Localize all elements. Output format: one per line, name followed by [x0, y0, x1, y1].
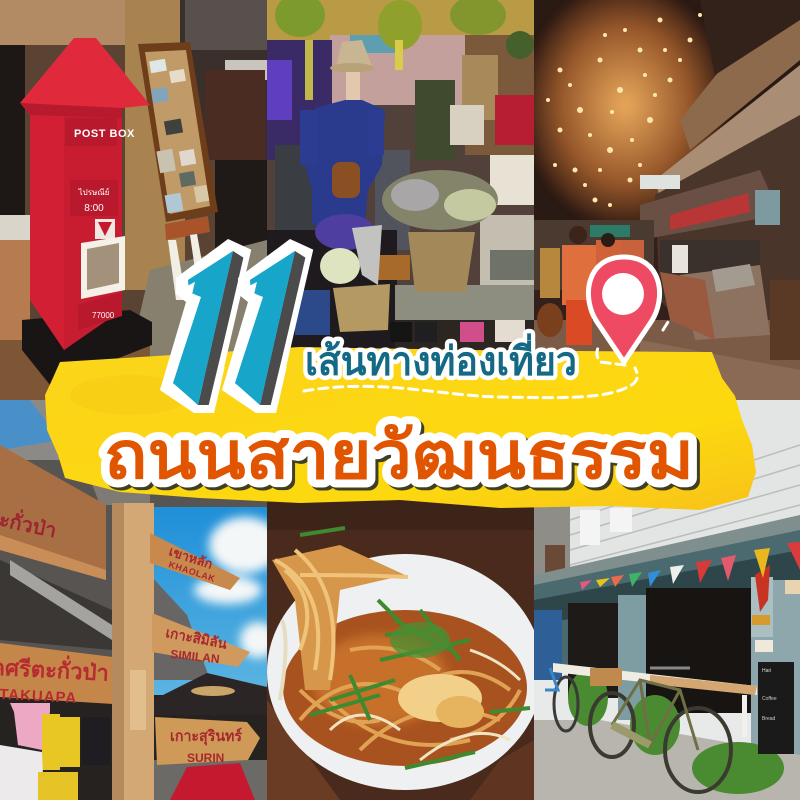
- chalkboard: Bread: [762, 716, 776, 722]
- flowers and baskets: [295, 170, 498, 335]
- photo: pad thai on a white plate: [267, 500, 534, 800]
- t-shirts on display: [0, 703, 80, 800]
- number 11: [160, 239, 314, 413]
- blue bicycle: [545, 668, 578, 731]
- main title: ถนนสายวัฒนธรรม: [104, 418, 694, 492]
- number 11: 1: [106, 203, 289, 453]
- sign: Similan: เกาะสิมิลัน: [164, 624, 229, 652]
- plants: [568, 670, 784, 794]
- number 11: 1: [106, 203, 289, 453]
- sign: Khaolak: เขาหลัก: [167, 544, 215, 572]
- sign: Similan: [152, 613, 250, 667]
- post box stand: [22, 310, 152, 385]
- sign: Surin: เกาะสุรินทร์: [170, 727, 243, 746]
- bunting flags: [580, 542, 800, 590]
- mannequin in blue dress: [300, 40, 385, 225]
- number 11: 1: [168, 203, 351, 453]
- subtitle: เส้นทางท่องเที่ยว: [305, 333, 577, 384]
- vintage bicycle: [590, 668, 731, 792]
- main title: ถนนสายวัฒนธรรม: [107, 421, 697, 495]
- chalkboard: Hari: [762, 668, 771, 674]
- noodles: [272, 528, 530, 768]
- sign: Similan: SIMILAN: [170, 647, 220, 666]
- yellow brush banner: [45, 347, 756, 510]
- photo board: [138, 42, 218, 222]
- sign: Takuapa: TAKUAPA: [0, 686, 78, 707]
- chalkboard: Coffee: [762, 696, 777, 702]
- dashed route line: [304, 322, 668, 398]
- plate: [267, 554, 543, 790]
- people in orange: [537, 226, 688, 345]
- photo: clothing shop with mannequin and baskets: [267, 0, 534, 350]
- chalkboard: [758, 662, 794, 754]
- pavement: [534, 720, 800, 800]
- photo: wooden direction signs: [0, 400, 281, 800]
- wooden post: [112, 503, 154, 800]
- post box body: [20, 38, 150, 350]
- subtitle: เส้นทางท่องเที่ยว: [305, 333, 577, 384]
- row of shoes: [390, 320, 525, 342]
- number 11: 1: [177, 203, 360, 453]
- red shirt: [170, 763, 255, 800]
- market stall: [660, 264, 800, 360]
- main title: ถนนสายวัฒนธรรม: [104, 418, 694, 492]
- umbrella: [163, 673, 267, 695]
- post box body: 8:00: [84, 203, 104, 214]
- number 11: 1: [168, 203, 351, 453]
- sign: Surin: SURIN: [187, 751, 224, 765]
- sign: Takuapa: [0, 643, 113, 707]
- photo: red post box: [0, 0, 267, 400]
- location pin icon: [588, 257, 660, 362]
- string lights: [546, 13, 702, 207]
- number 11: 1: [115, 203, 298, 453]
- photo: night market with string lights: [525, 0, 800, 400]
- post box body: POST BOX: [74, 128, 135, 140]
- table and wooden crate: [553, 663, 757, 737]
- sign: Surin: [155, 717, 260, 765]
- shop windows: [568, 603, 618, 698]
- post box body: ไปรษณีย์: [78, 187, 109, 197]
- sign: Khaolak: [150, 533, 240, 590]
- post box body: 77000: [92, 311, 115, 320]
- sign: Khaolak: KHAOLAK: [167, 559, 217, 584]
- photo: bicycles in front of a blue shop: [534, 400, 800, 800]
- sign: top left board: [0, 445, 106, 580]
